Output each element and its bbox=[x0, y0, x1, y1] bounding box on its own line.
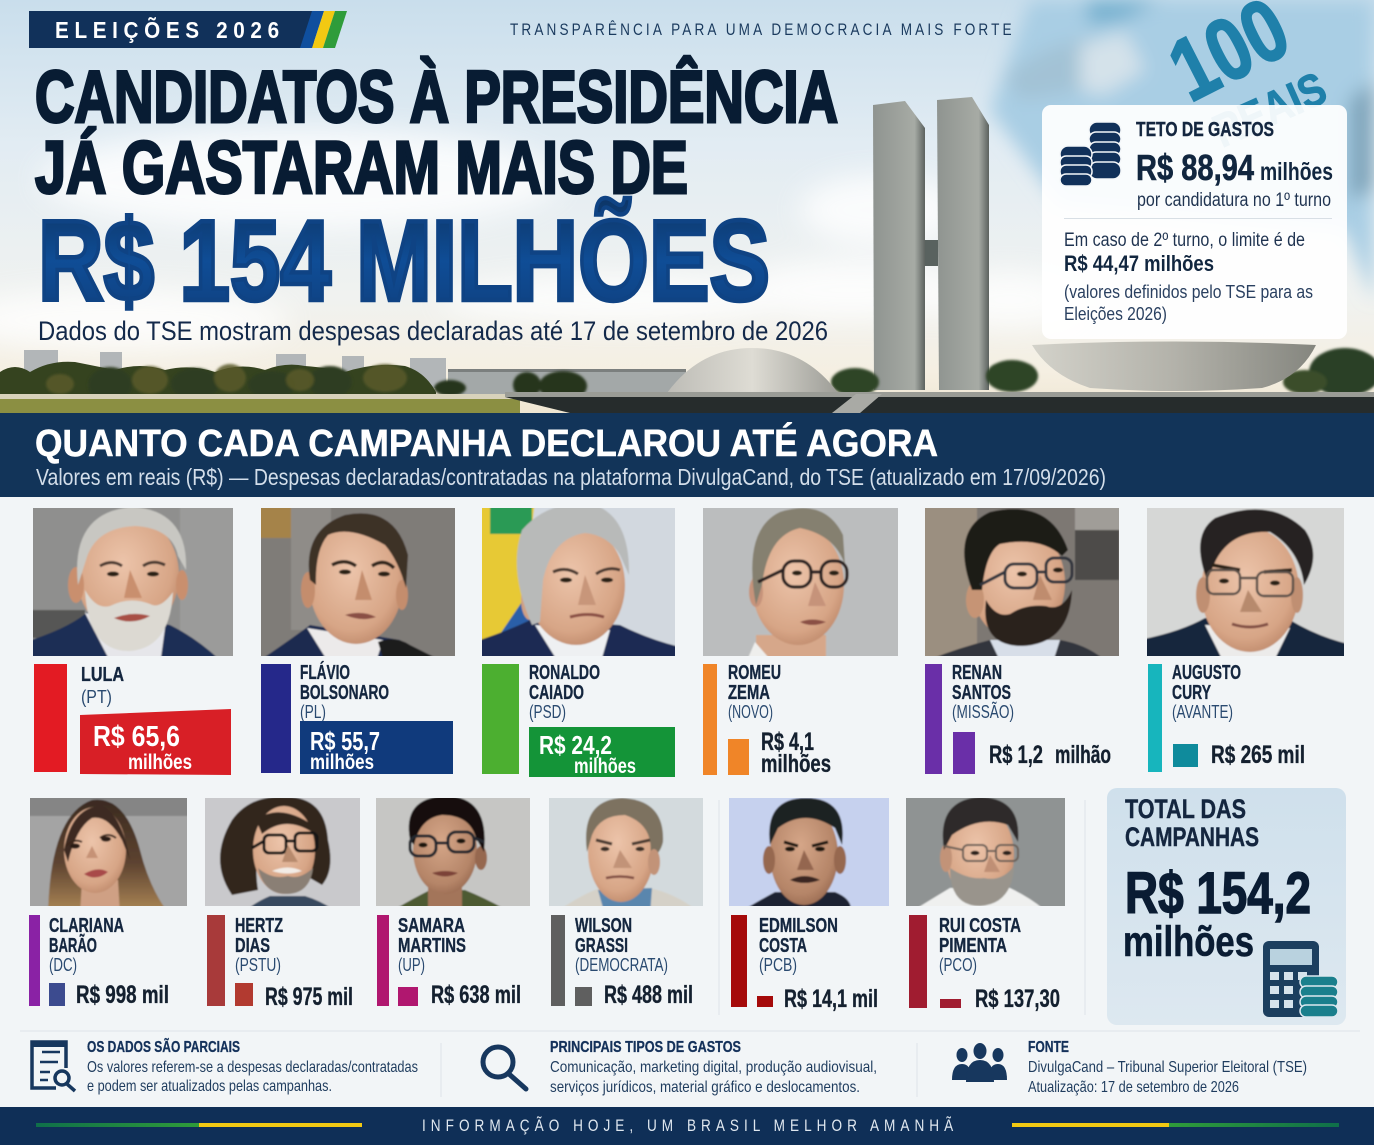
icon: calculator with coins bbox=[1263, 941, 1338, 1017]
name and party bbox=[1172, 662, 1241, 722]
name and party: (PL) bbox=[300, 702, 326, 722]
value bbox=[989, 741, 1111, 769]
title: R$ 154 MILHÕES bbox=[38, 198, 770, 325]
name and party: COSTA bbox=[759, 935, 807, 957]
value: milhões bbox=[761, 750, 831, 778]
name and party: CLARIANA bbox=[49, 915, 124, 937]
candidate: Clariana Barão bbox=[22, 790, 195, 1009]
panel: teto de gastos: milhões bbox=[1260, 158, 1333, 186]
name and party: EDMILSON bbox=[759, 915, 838, 937]
icon: people bbox=[952, 1043, 1007, 1082]
note: os dados são parciais: Os valores referem-se a despesas declaradas/contratadas bbox=[87, 1059, 418, 1076]
value bbox=[539, 730, 636, 778]
value bar bbox=[757, 996, 773, 1007]
name and party bbox=[939, 915, 1021, 975]
senate dome bbox=[667, 348, 838, 393]
value: R$ 488 mil bbox=[604, 981, 693, 1009]
party colour bar bbox=[34, 664, 67, 772]
candidate: Samara Martins bbox=[368, 790, 538, 1009]
value: milhão bbox=[1055, 741, 1111, 769]
name and party bbox=[49, 915, 124, 975]
portrait: Hertz bbox=[205, 798, 360, 906]
party colour bar bbox=[377, 915, 389, 1006]
value: milhões bbox=[128, 751, 192, 774]
candidate: Renan Santos bbox=[917, 500, 1127, 774]
name and party: SAMARA bbox=[398, 915, 465, 937]
candidate: Augusto Cury bbox=[1139, 500, 1353, 772]
panel: total das campanhas: milhões bbox=[1123, 918, 1254, 966]
name and party: PIMENTA bbox=[939, 935, 1007, 957]
portrait: Clariana bbox=[30, 798, 187, 906]
value bar bbox=[80, 709, 231, 775]
name and party: GRASSI bbox=[575, 935, 628, 957]
trees and city bbox=[0, 348, 1374, 413]
portrait: Wilson bbox=[549, 798, 703, 906]
name and party: CURY bbox=[1172, 682, 1211, 704]
name and party: AUGUSTO bbox=[1172, 662, 1241, 684]
name and party bbox=[398, 915, 466, 975]
name and party: BARÃO bbox=[49, 934, 97, 957]
banknote: REAIS bbox=[1205, 62, 1334, 157]
section heading band: QUANTO CADA CAMPANHA DECLAROU ATÉ AGORA bbox=[35, 421, 938, 465]
panel: teto de gastos: TETO DE GASTOS bbox=[1136, 119, 1274, 141]
name and party: RENAN bbox=[952, 662, 1002, 684]
note: fonte: Atualização: 17 de setembro de 2026 bbox=[1028, 1079, 1239, 1096]
name and party: FLÁVIO bbox=[300, 661, 350, 684]
panel: total das campanhas: CAMPANHAS bbox=[1125, 822, 1259, 852]
party colour bar bbox=[551, 915, 565, 1006]
value: R$ 137,30 bbox=[975, 985, 1060, 1013]
portrait: Caiado bbox=[482, 508, 675, 656]
chamber bowl bbox=[1032, 342, 1316, 391]
name and party: (MISSÃO) bbox=[952, 701, 1014, 722]
party colour bar bbox=[29, 915, 40, 1006]
name and party: (UP) bbox=[398, 955, 425, 975]
candidate: Romeu Zema bbox=[695, 500, 907, 778]
name and party bbox=[235, 915, 283, 975]
name and party: WILSON bbox=[575, 915, 632, 937]
name and party bbox=[759, 915, 838, 975]
candidate: Wilson Grassi bbox=[541, 790, 711, 1009]
candidate: Lula bbox=[25, 500, 240, 775]
party colour bar bbox=[261, 664, 291, 773]
icon: document with magnifier bbox=[32, 1041, 75, 1091]
name and party: RONALDO bbox=[529, 662, 600, 684]
party colour bar bbox=[1148, 664, 1162, 772]
candidate: Hertz Dias bbox=[197, 790, 368, 1011]
value: R$ 4,1 bbox=[761, 728, 814, 756]
title: JÁ GASTARAM MAIS DE bbox=[35, 126, 688, 209]
name and party: (PCO) bbox=[939, 955, 977, 975]
value: R$ 975 mil bbox=[265, 983, 353, 1011]
value bar bbox=[953, 732, 975, 774]
value: R$ 265 mil bbox=[1211, 741, 1305, 769]
name and party: LULA bbox=[81, 664, 124, 686]
portrait: Lula bbox=[33, 508, 233, 656]
value: R$ 998 mil bbox=[76, 981, 169, 1009]
value: R$ 1,2 bbox=[989, 741, 1043, 769]
name and party: (AVANTE) bbox=[1172, 702, 1233, 722]
panel: teto de gastos: R$ 44,47 milhões bbox=[1064, 251, 1214, 276]
portrait: Zema bbox=[703, 508, 898, 656]
portrait: Samara bbox=[376, 798, 530, 906]
name and party: (DEMOCRATA) bbox=[575, 955, 668, 975]
party colour bar bbox=[909, 915, 927, 1008]
value: R$ 14,1 mil bbox=[784, 985, 878, 1013]
name and party bbox=[575, 915, 668, 975]
name and party: MARTINS bbox=[398, 935, 466, 957]
name and party: (DC) bbox=[49, 955, 77, 975]
section heading band: Valores em reais (R$) — Despesas declaradas/contratadas na plataforma DivulgaCand, do TSE (atualizado em 17/09/2026) bbox=[36, 464, 1106, 490]
portrait: Renan bbox=[925, 508, 1119, 656]
name and party: DIAS bbox=[235, 935, 270, 957]
note: fonte bbox=[952, 1039, 1307, 1096]
name and party bbox=[529, 662, 600, 722]
value bar bbox=[300, 721, 453, 774]
esplanade platform bbox=[505, 392, 1374, 413]
panel: teto de gastos: por candidatura no 1º turno bbox=[1137, 190, 1331, 211]
party colour bar bbox=[482, 664, 519, 774]
name and party bbox=[300, 661, 389, 722]
panel: total das campanhas bbox=[1107, 788, 1346, 1025]
party colour bar bbox=[207, 915, 225, 1006]
name and party: SANTOS bbox=[952, 682, 1011, 704]
name and party: ZEMA bbox=[728, 682, 770, 704]
panel: teto de gastos bbox=[1042, 105, 1347, 339]
value bar bbox=[235, 983, 253, 1006]
name and party: (NOVO) bbox=[728, 702, 773, 722]
value: R$ 24,2 bbox=[539, 730, 612, 760]
panel: teto de gastos: Eleições 2026) bbox=[1064, 304, 1167, 324]
section heading band bbox=[0, 413, 1374, 497]
name and party: (PSD) bbox=[529, 702, 566, 722]
name and party: (PCB) bbox=[759, 955, 797, 975]
portrait: Flávio bbox=[261, 508, 455, 656]
value: milhões bbox=[310, 751, 374, 774]
footer band: INFORMAÇÃO HOJE, UM BRASIL MELHOR AMANHÃ bbox=[422, 1117, 954, 1135]
note: os dados são parciais: e podem ser atualizados pelas campanhas. bbox=[87, 1078, 332, 1095]
badge: Eleições 2026 bbox=[29, 11, 347, 48]
icon: magnifier bbox=[483, 1047, 526, 1089]
title bbox=[35, 57, 838, 325]
header photo: Brasília skyline bbox=[0, 0, 1374, 413]
note: principais tipos de gastos: serviços jurídicos, material gráfico e deslocamentos. bbox=[550, 1079, 860, 1096]
value: milhões bbox=[574, 755, 636, 778]
value bar bbox=[728, 739, 749, 775]
panel: total das campanhas: R$ 154,2 bbox=[1125, 861, 1311, 926]
value: R$ 638 mil bbox=[431, 981, 521, 1009]
name and party: RUI COSTA bbox=[939, 915, 1021, 937]
panel: total das campanhas: TOTAL DAS bbox=[1125, 794, 1246, 824]
note: principais tipos de gastos: PRINCIPAIS TIPOS DE GASTOS bbox=[550, 1039, 741, 1056]
portrait: Edmilson bbox=[729, 798, 889, 906]
value bar bbox=[529, 727, 675, 777]
portrait: Rui bbox=[906, 798, 1065, 906]
note: fonte: DivulgaCand – Tribunal Superior Eleitoral (TSE) bbox=[1028, 1059, 1307, 1076]
value bar bbox=[575, 987, 592, 1006]
candidate: Rui Costa Pimenta bbox=[898, 790, 1073, 1013]
note: fonte: FONTE bbox=[1028, 1039, 1069, 1056]
name and party: BOLSONARO bbox=[300, 682, 389, 704]
towers of the National Congress bbox=[873, 97, 989, 390]
name and party bbox=[81, 664, 124, 707]
value bar bbox=[49, 983, 65, 1006]
value bbox=[310, 726, 380, 774]
value bar bbox=[398, 987, 418, 1006]
panel: teto de gastos: Em caso de 2º turno, o limite é de bbox=[1064, 230, 1305, 251]
candidate: Ronaldo Caiado bbox=[474, 500, 684, 778]
name and party bbox=[728, 662, 781, 722]
banknote bbox=[990, 0, 1374, 300]
value: R$ 65,6 bbox=[93, 721, 180, 753]
panel: teto de gastos: (valores definidos pelo TSE para as bbox=[1064, 282, 1313, 302]
note: os dados são parciais bbox=[32, 1036, 418, 1095]
party colour bar bbox=[925, 664, 942, 774]
candidate: Edmilson Costa bbox=[721, 790, 897, 1013]
footer band bbox=[0, 1107, 1374, 1145]
value bar bbox=[1173, 744, 1198, 767]
icon: coins bbox=[1060, 122, 1121, 186]
name and party: CAIADO bbox=[529, 682, 584, 704]
name and party: ROMEU bbox=[728, 662, 781, 684]
note: principais tipos de gastos bbox=[483, 1039, 877, 1096]
title: CANDIDATOS À PRESIDÊNCIA bbox=[35, 57, 838, 138]
name and party: (PSTU) bbox=[235, 955, 281, 975]
badge: Eleições 2026: ELEIÇÕES 2026 bbox=[55, 17, 279, 43]
party colour bar bbox=[703, 664, 717, 775]
note: os dados são parciais: OS DADOS SÃO PARCIAIS bbox=[87, 1036, 240, 1056]
value bar bbox=[940, 999, 961, 1008]
name and party: (PT) bbox=[81, 687, 112, 707]
name and party: HERTZ bbox=[235, 915, 283, 937]
party colour bar bbox=[731, 915, 747, 1007]
value: R$ 55,7 bbox=[310, 726, 380, 756]
subtitle: Dados do TSE mostram despesas declaradas até 17 de setembro de 2026 bbox=[38, 316, 828, 346]
panel: teto de gastos: R$ 88,94 bbox=[1136, 147, 1254, 188]
name and party bbox=[952, 662, 1014, 722]
candidate: Flávio Bolsonaro bbox=[253, 500, 463, 774]
tagline: TRANSPARÊNCIA PARA UMA DEMOCRACIA MAIS FORTE bbox=[510, 21, 1012, 39]
value bbox=[93, 721, 192, 774]
note: principais tipos de gastos: Comunicação, marketing digital, produção audiovisual, bbox=[550, 1059, 877, 1076]
portrait: Cury bbox=[1147, 508, 1344, 656]
value bbox=[761, 728, 831, 778]
